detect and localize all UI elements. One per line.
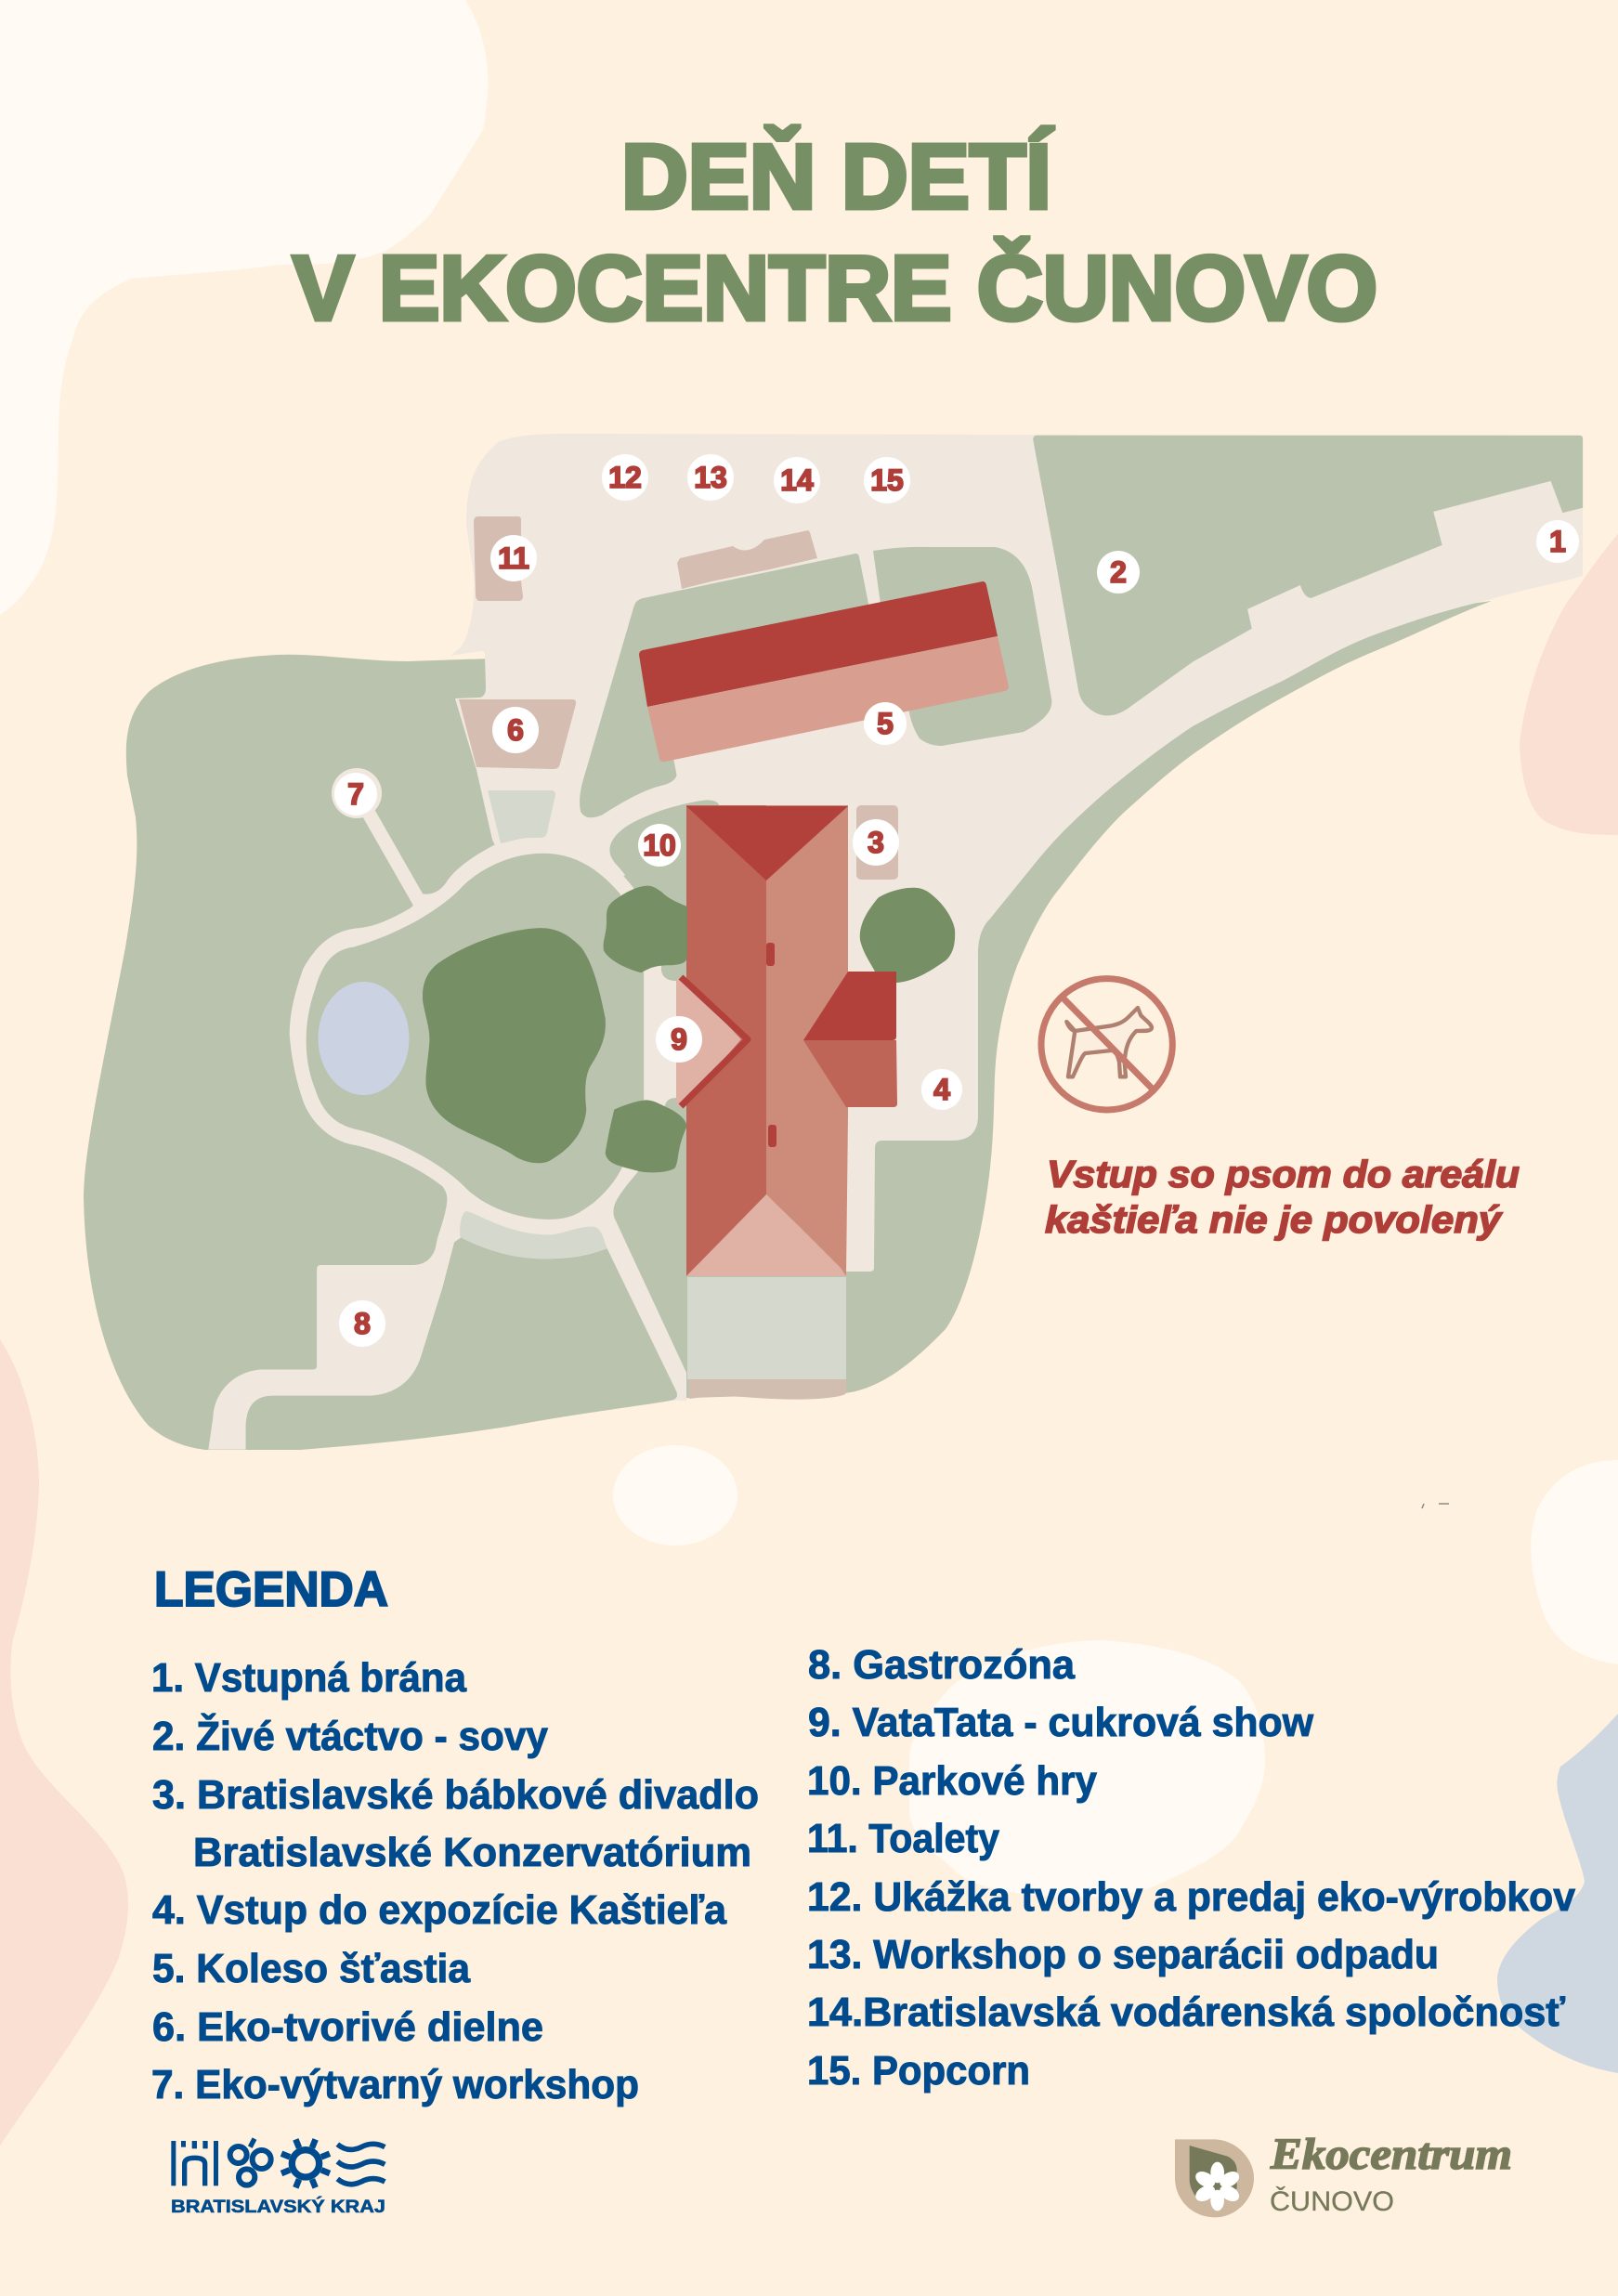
blob: top left white	[0, 0, 489, 615]
marker 1	[1536, 520, 1579, 563]
marker 14	[774, 457, 820, 503]
blob: center white	[613, 1445, 737, 1546]
roof right	[766, 805, 848, 1276]
west wing chevron	[681, 977, 748, 1106]
blob: right white	[1531, 1460, 1618, 1664]
map	[84, 434, 1583, 1450]
marker 6: 6	[507, 713, 524, 747]
green patch: area 2	[1033, 436, 1583, 716]
legend left column: 6. Eko-tvorivé dielne	[152, 2004, 543, 2050]
roof top red	[686, 806, 848, 881]
marker 5: 5	[877, 707, 894, 740]
chimney upper	[766, 943, 775, 966]
building 3 annex	[856, 805, 898, 880]
tree lower by manor	[606, 1100, 687, 1172]
legend right column: 13. Workshop o separácii odpadu	[807, 1932, 1439, 1977]
logo: Ekocentrum Čunovo: ČUNOVO	[1270, 2185, 1394, 2217]
light trapezoid	[488, 790, 555, 843]
marker 9	[656, 1016, 702, 1063]
marker 9: 9	[671, 1023, 687, 1056]
green notch upper	[661, 961, 687, 983]
logo: Bratislavský kraj	[171, 2139, 385, 2217]
green island inside ring	[307, 854, 644, 1220]
east wing red	[803, 972, 896, 1040]
marker 12: 12	[608, 461, 642, 494]
dog notice text: Vstup so psom do areálu	[1047, 1153, 1520, 1195]
circle end of path 7	[332, 768, 382, 818]
park ring road and gastro zone	[208, 836, 686, 1450]
marker 15	[864, 457, 910, 503]
path to point 7	[360, 799, 420, 903]
marker 10	[638, 824, 681, 867]
park lawn	[84, 601, 1492, 1450]
marker 8: 8	[354, 1307, 371, 1340]
light strip	[460, 1211, 607, 1259]
legend right column: 14.Bratislavská vodárenská spoločnosť	[807, 1989, 1566, 2035]
marker 8	[339, 1300, 385, 1347]
legend right column: 12. Ukážka tvorby a predaj eko-výrobkov	[807, 1874, 1576, 1920]
marker 15: 15	[870, 463, 904, 497]
title: DEŇ DETÍ	[621, 125, 1054, 228]
legend right column: 9. VataTata - cukrová show	[808, 1700, 1314, 1745]
title	[293, 125, 1377, 339]
legend left column	[151, 1655, 759, 2107]
legend left column: 7. Eko-výtvarný workshop	[151, 2062, 639, 2107]
blob: right pink	[1520, 534, 1618, 835]
marker 2: 2	[1110, 555, 1127, 589]
green patch: area 10	[609, 800, 719, 926]
marker 7	[334, 773, 377, 815]
legend right column: 10. Parkové hry	[807, 1758, 1097, 1804]
pond	[318, 982, 409, 1095]
forecourt	[687, 1277, 846, 1379]
logo: Ekocentrum Čunovo	[1175, 2130, 1512, 2217]
blob: left bottom pink	[0, 1339, 128, 2146]
blob: right blue	[1497, 1714, 1618, 2073]
marker 2	[1097, 551, 1140, 594]
tree upper by manor	[604, 886, 687, 972]
marker 11: 11	[498, 541, 529, 575]
legend right column: 11. Toalety	[807, 1816, 999, 1861]
marker 11	[490, 535, 537, 581]
green notch lower	[665, 1098, 687, 1119]
marker 7: 7	[347, 777, 364, 811]
building: workshop 6	[459, 699, 576, 769]
logo: Bratislavský kraj: BRATISLAVSKÝ KRAJ	[171, 2197, 385, 2217]
building: toilets 11	[474, 516, 523, 601]
green patch: central north	[580, 554, 868, 817]
legend left column: 3. Bratislavské bábkové divadlo	[152, 1772, 759, 1818]
legend left column: 4. Vstup do expozície Kaštieľa	[152, 1887, 727, 1933]
building 5	[639, 581, 1009, 762]
blob: legend white	[909, 1640, 1265, 1898]
main manor building	[676, 805, 897, 1400]
legend left column: 2. Živé vtáctvo - sovy	[152, 1713, 548, 1759]
marker 13	[687, 454, 734, 501]
forecourt tan strip	[688, 1379, 846, 1400]
legend right column	[807, 1642, 1576, 2094]
logo: Ekocentrum Čunovo: Ekocentrum	[1270, 2130, 1512, 2179]
legend right column: 15. Popcorn	[807, 2048, 1030, 2094]
tree right	[860, 888, 955, 983]
dog notice text: kaštieľa nie je povolený	[1045, 1198, 1503, 1241]
marker 12	[602, 454, 648, 501]
marker 4	[921, 1069, 962, 1110]
marker 5	[864, 702, 907, 745]
legend left column: 1. Vstupná brána	[151, 1655, 466, 1701]
marker 13: 13	[694, 461, 727, 494]
tiny marks	[1422, 1504, 1449, 1508]
marker 6	[492, 707, 539, 753]
roof left	[686, 805, 767, 1276]
marker 3	[853, 819, 899, 866]
west wing	[676, 979, 741, 1105]
marker 4: 4	[933, 1073, 950, 1106]
roof bottom gable	[686, 1194, 846, 1276]
green patch: around building 5 east	[873, 547, 1051, 746]
legend left column: 5. Koleso šťastia	[152, 1946, 471, 1991]
tree large	[423, 928, 606, 1163]
legend right column: 8. Gastrozóna	[808, 1642, 1076, 1688]
marker 10: 10	[643, 828, 676, 862]
east wing lower	[803, 1040, 897, 1107]
building: tan outbuilding north	[677, 530, 817, 589]
dog notice text	[1045, 1153, 1520, 1241]
chimney lower	[768, 1125, 776, 1147]
legend left column: Bratislavské Konzervatórium	[193, 1830, 751, 1875]
title: V EKOCENTRE ČUNOVO	[293, 237, 1377, 339]
marker 1: 1	[1549, 525, 1566, 558]
marker 3: 3	[868, 826, 884, 859]
courtyard and entrance road	[450, 434, 1583, 1274]
legend heading: LEGENDA	[154, 1562, 388, 1617]
marker 14: 14	[780, 463, 814, 497]
icon: no dogs	[1041, 979, 1172, 1110]
